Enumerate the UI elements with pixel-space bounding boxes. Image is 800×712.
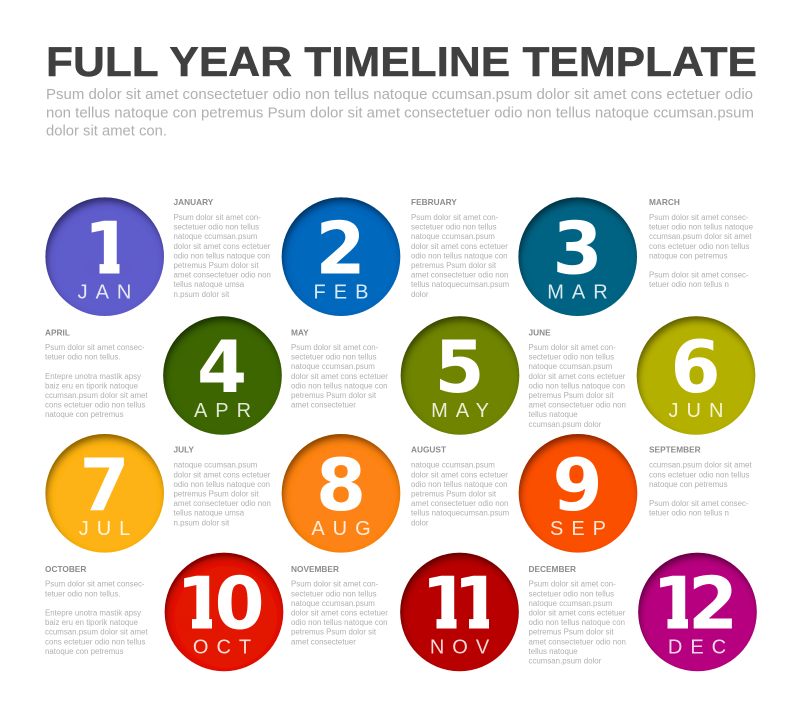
- month 4: April circle: 4: [197, 325, 247, 409]
- text: November: natoque ccumsan.psum: [291, 599, 375, 608]
- month 12: December circle: DEC: [668, 636, 734, 658]
- text: August: dolor sit amet cons ectetuer: [411, 470, 508, 479]
- text: September: natoque con petremus: [649, 480, 728, 489]
- text: October: baiz eru en tiporik natoque: [45, 618, 139, 627]
- month 1: January circle: [45, 197, 164, 316]
- text: December: dolor sit amet cons ectetuer: [528, 608, 626, 618]
- text: October: Entepre unotra mastik apsy: [45, 608, 141, 618]
- text: October: OCTOBER: [45, 564, 86, 574]
- text: November: NOVEMBER: [291, 564, 339, 574]
- text: September: SEPTEMBER: [649, 445, 701, 455]
- month 12: December circle: 1: [652, 562, 702, 646]
- text: August: odio non tellus natoque con: [411, 480, 508, 489]
- month 7: July circle: 7: [79, 443, 130, 527]
- month 7: July circle: [45, 434, 164, 553]
- text: October: cons ectetuer odio non tellus: [45, 637, 146, 646]
- month 11: November circle: NOV: [430, 636, 497, 658]
- text: January: natoque ccumsan.psum: [174, 232, 258, 241]
- text: December: sectetuer odio non tellus: [528, 589, 614, 598]
- text: June: odio non tellus natoque con: [528, 381, 625, 390]
- month 3: March circle: [518, 197, 637, 316]
- month 11: November circle: 1: [421, 562, 471, 646]
- text: September: Psum dolor sit amet consec-: [649, 499, 749, 508]
- month 2: February circle: 2: [315, 206, 366, 290]
- text: May: odio non tellus natoque con: [291, 381, 388, 390]
- text: March: ccumsan.psum dolor sit amet: [649, 232, 752, 241]
- text: July: petremus Psum dolor sit: [174, 490, 259, 498]
- text: November: odio non tellus natoque con: [291, 618, 388, 627]
- text: June: sectetuer odio non tellus: [528, 353, 614, 362]
- text: June: JUNE: [528, 327, 551, 337]
- text: February: tellus natoquecumsan.psum: [411, 280, 510, 289]
- text: March: natoque con petremus: [649, 251, 728, 260]
- intro paragraph: non tellus natoque con petremus Psum dolor sit amet consectetuer odio non tellus natoque ccumsan.psum: [46, 106, 754, 122]
- text: April: ccumsan.psum dolor sit amet: [45, 391, 148, 400]
- text: July: tellus natoque umsa: [174, 509, 245, 518]
- text: December: Psum dolor sit amet con-: [528, 580, 616, 589]
- text: February: dolor sit amet cons ectetuer: [411, 242, 508, 251]
- month 10: October circle: OCT: [193, 636, 259, 658]
- month 5: May circle: 5: [434, 325, 485, 409]
- text: October: Psum dolor sit amet consec-: [45, 580, 145, 589]
- month 3: March circle: MAR: [547, 281, 616, 303]
- title: FULL YEAR TIMELINE TEMPLATE: [46, 38, 757, 85]
- month 4: April circle: [163, 316, 282, 435]
- text: June: ccumsan.psum dolor: [528, 420, 602, 429]
- text: January: dolor sit amet cons ectetuer: [174, 242, 271, 251]
- text: October: ccumsan.psum dolor sit amet: [45, 628, 148, 637]
- text: June: amet consectetuer odio non: [528, 401, 626, 410]
- month 1: January circle: JAN: [78, 281, 139, 303]
- text: November: petremus Psum dolor sit: [291, 628, 377, 637]
- month 12: December circle: [638, 553, 757, 671]
- intro paragraph: Psum dolor sit amet consectetuer odio non tellus natoque ccumsan.psum dolor sit amet cons ectetuer odio: [46, 87, 753, 103]
- text: May: amet consectetuer: [291, 401, 356, 410]
- text: June: natoque ccumsan.psum: [528, 362, 613, 371]
- text: February: dolor: [411, 290, 429, 299]
- text: April: natoque con petremus: [45, 410, 124, 419]
- text: August: tellus natoquecumsan.psum: [411, 509, 510, 518]
- month 9: September circle: [519, 434, 637, 553]
- intro paragraph: dolor sit amet con.: [46, 124, 167, 140]
- text: March: MARCH: [649, 197, 680, 207]
- text: March: cons ectetuer odio non tellus: [649, 242, 750, 251]
- month 5: May circle: [401, 316, 519, 435]
- month 7: July circle: JUL: [79, 518, 138, 540]
- text: August: natoque ccumsan.psum: [411, 461, 495, 470]
- text: February: amet consectetuer odio non: [411, 271, 508, 280]
- text: April: cons ectetuer odio non tellus: [45, 401, 146, 410]
- text: May: dolor sit amet cons ectetuer: [291, 372, 388, 381]
- text: December: petremus Psum dolor sit: [528, 628, 614, 637]
- text: June: Psum dolor sit amet con-: [528, 343, 616, 352]
- text: December: DECEMBER: [528, 564, 576, 574]
- text: March: Psum dolor sit amet consec-: [649, 213, 749, 222]
- month 1: January circle: 1: [84, 206, 134, 290]
- text: July: amet consectetuer odio non: [174, 499, 271, 508]
- text: April: Psum dolor sit amet consec-: [45, 343, 145, 352]
- month 2: February circle: [282, 197, 400, 316]
- month 11: November circle: 1: [453, 562, 503, 646]
- text: September: cons ectetuer odio non tellus: [649, 470, 750, 479]
- text: May: MAY: [291, 327, 309, 337]
- text: December: amet consectetuer odio non: [528, 637, 626, 646]
- month 3: March circle: 3: [552, 206, 603, 290]
- month 10: October circle: 1: [176, 562, 226, 646]
- text: May: natoque ccumsan.psum: [291, 362, 375, 371]
- text: April: tetuer odio non tellus.: [45, 353, 120, 362]
- month 8: August circle: AUG: [311, 518, 379, 540]
- text: November: amet consectetuer: [291, 637, 356, 646]
- text: February: FEBRUARY: [411, 197, 457, 207]
- text: April: baiz eru en tiporik natoque: [45, 381, 139, 390]
- text: March: Psum dolor sit amet consec-: [649, 271, 749, 280]
- text: January: tellus natoque umsa: [174, 280, 245, 289]
- text: October: natoque con petremus: [45, 647, 124, 656]
- text: March: tetuer odio non tellus natoque: [649, 223, 754, 232]
- text: January: petremus Psum dolor sit: [174, 261, 259, 270]
- text: August: amet consectetuer odio non: [411, 499, 508, 508]
- text: January: odio non tellus natoque con: [174, 251, 270, 260]
- month 12: December circle: 2: [688, 562, 738, 646]
- intro paragraph: [46, 87, 754, 140]
- text: February: natoque ccumsan.psum: [411, 232, 495, 241]
- text: May: petremus Psum dolor sit: [291, 391, 377, 400]
- text: August: dolor: [411, 518, 429, 527]
- month 9: September circle: 9: [552, 443, 603, 527]
- month 10: October circle: 0: [214, 562, 265, 646]
- text: February: petremus Psum dolor sit: [411, 261, 497, 270]
- text: December: ccumsan.psum dolor: [528, 656, 602, 666]
- month 4: April circle: APR: [194, 400, 259, 422]
- text: June: tellus natoque: [528, 410, 578, 419]
- month 9: September circle: SEP: [550, 518, 614, 540]
- text: March: tetuer odio non tellus n: [649, 280, 729, 289]
- text: December: tellus natoque: [528, 647, 578, 656]
- text: January: sectetuer odio non tellus: [174, 223, 259, 232]
- text: April: Entepre unotra mastik apsy: [45, 372, 141, 381]
- text: July: natoque ccumsan.psum: [174, 461, 258, 470]
- text: February: sectetuer odio non tellus: [411, 223, 497, 232]
- month 8: August circle: [282, 434, 400, 553]
- text: January: JANUARY: [174, 197, 214, 207]
- month 11: November circle: [400, 553, 519, 671]
- month 10: October circle: [165, 553, 283, 671]
- text: January: n.psum dolor sit: [174, 290, 230, 299]
- text: July: odio non tellus natoque con: [174, 480, 270, 489]
- text: November: Psum dolor sit amet con-: [291, 580, 379, 589]
- text: August: petremus Psum dolor sit: [411, 490, 497, 498]
- month 2: February circle: FEB: [314, 281, 376, 303]
- text: January: Psum dolor sit amet con-: [174, 213, 261, 222]
- text: November: dolor sit amet cons ectetuer: [291, 608, 388, 618]
- text: June: dolor sit amet cons ectetuer: [528, 372, 626, 381]
- text: February: odio non tellus natoque con: [411, 251, 508, 260]
- text: September: ccumsan.psum dolor sit amet: [649, 461, 752, 470]
- text: January: amet consectetuer odio non: [174, 271, 271, 280]
- text: February: Psum dolor sit amet con-: [411, 213, 499, 222]
- text: July: JULY: [174, 445, 194, 455]
- text: July: dolor sit amet cons ectetuer: [174, 470, 271, 479]
- text: December: odio non tellus natoque con: [528, 618, 625, 627]
- text: November: sectetuer odio non tellus: [291, 589, 377, 598]
- text: October: tetuer odio non tellus.: [45, 589, 120, 598]
- text: June: petremus Psum dolor sit: [528, 391, 614, 400]
- text: September: tetuer odio non tellus n: [649, 509, 729, 518]
- month 8: August circle: 8: [316, 443, 366, 527]
- text: May: sectetuer odio non tellus: [291, 353, 377, 362]
- month 6: June circle: 6: [670, 325, 721, 409]
- month 6: June circle: [637, 316, 755, 435]
- text: August: AUGUST: [411, 445, 446, 455]
- text: July: n.psum dolor sit: [174, 518, 230, 527]
- month 5: May circle: MAY: [431, 400, 497, 422]
- month 6: June circle: JUN: [669, 400, 731, 422]
- text: May: Psum dolor sit amet con-: [291, 343, 379, 352]
- text: April: APRIL: [45, 327, 70, 337]
- text: December: natoque ccumsan.psum: [528, 599, 613, 608]
